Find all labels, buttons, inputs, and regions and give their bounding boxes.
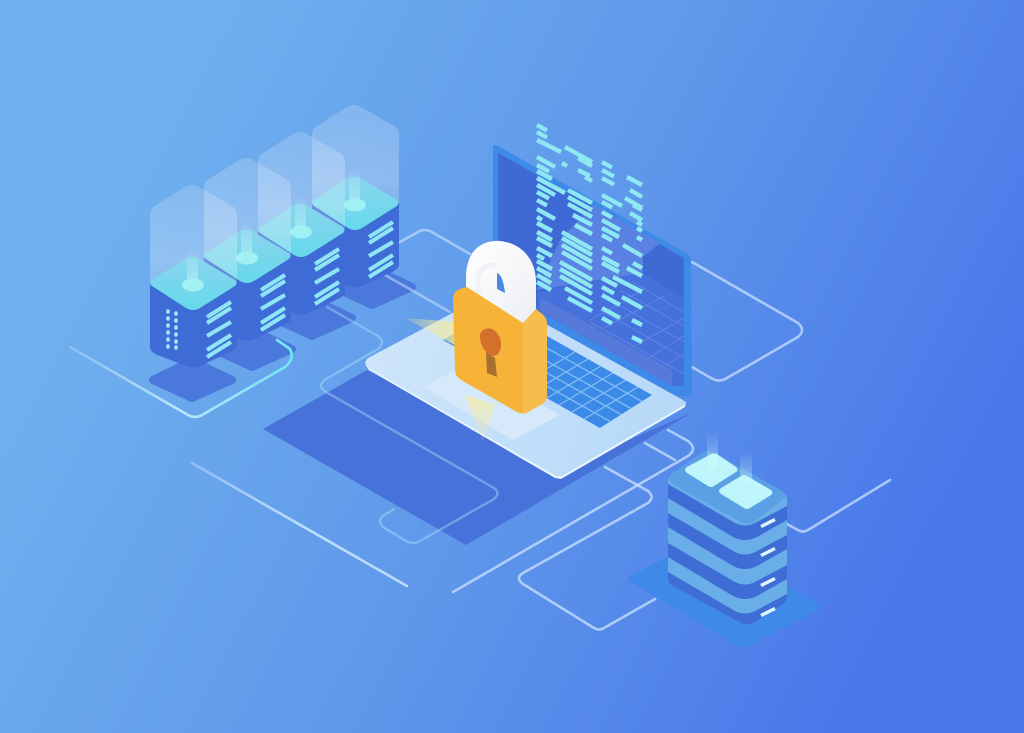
- data tower: [628, 432, 820, 647]
- padlock: [453, 241, 547, 414]
- shackle opening: [497, 273, 505, 293]
- shackle: [466, 241, 536, 326]
- trackpad: [423, 362, 560, 440]
- shackle inner shading: [478, 265, 497, 298]
- tower body: [668, 451, 787, 624]
- lower screen area: [537, 273, 684, 386]
- server unit 3: [258, 132, 345, 314]
- servers row: [150, 105, 399, 368]
- lighter screen reflection: [537, 205, 660, 290]
- server floor plates: [153, 268, 412, 398]
- keyhole: [480, 328, 501, 377]
- light beams: [707, 432, 718, 470]
- tower base plate: [628, 537, 820, 647]
- laptop base: [365, 364, 686, 479]
- laptop shadow: [263, 370, 693, 545]
- glowing tile left: [685, 454, 738, 487]
- tower top face: [670, 451, 786, 524]
- tier bands: [668, 484, 787, 624]
- yellow light rays: [405, 318, 495, 442]
- server unit 4: [312, 105, 399, 288]
- laptop: [365, 145, 692, 479]
- hinge strip: [540, 297, 672, 386]
- laptop screen: [493, 145, 692, 397]
- lock side face: [523, 311, 547, 413]
- lower right circuit lines: [453, 430, 890, 630]
- server unit 1: [150, 185, 237, 368]
- keyboard reflection on screen: [590, 282, 684, 374]
- indicator dots: [168, 311, 176, 348]
- tier slots: [761, 520, 775, 616]
- code lines: [537, 125, 642, 342]
- glowing tile right: [719, 475, 772, 509]
- server unit 2: [204, 158, 291, 340]
- keyboard: [443, 308, 652, 428]
- lock body: [453, 287, 547, 414]
- circuit lines: [70, 230, 802, 586]
